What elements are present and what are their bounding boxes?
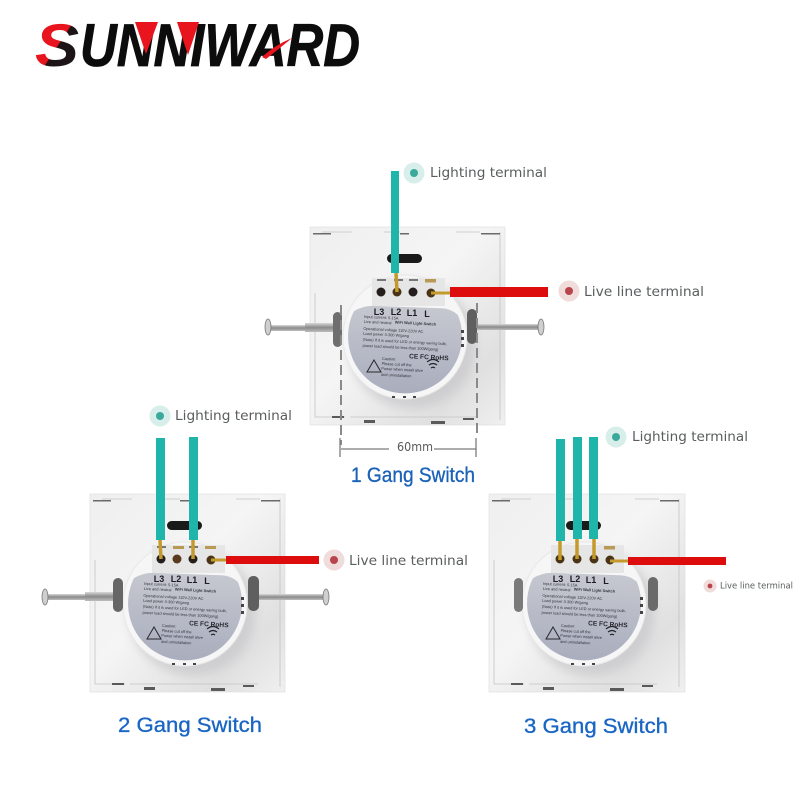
callout: lighting terminal, 3 gang: Lighting terminal bbox=[632, 429, 748, 445]
label text: Power when install alive bbox=[560, 633, 602, 640]
label text: Load power 3-300 W/gang bbox=[542, 598, 588, 605]
callout: lighting terminal, 3 gang bbox=[606, 426, 748, 448]
label text: and uninstallation bbox=[161, 639, 191, 645]
module shadow bbox=[348, 281, 476, 409]
heading: 2 Gang Switch: 2 Gang Switch bbox=[118, 713, 262, 737]
product label bbox=[525, 572, 642, 662]
module shadow bbox=[527, 548, 655, 676]
frame lines bbox=[95, 499, 280, 687]
product label bbox=[346, 305, 463, 395]
icon: warning triangle bbox=[546, 627, 560, 639]
dimension: 60mm bbox=[340, 303, 477, 457]
icon: wifi bbox=[207, 626, 219, 635]
label text: Operational voltage 110V-220V AC bbox=[542, 593, 603, 601]
label text: Operational voltage 110V-220V AC bbox=[143, 593, 204, 601]
terminal names bbox=[553, 574, 609, 586]
label text: Please cut off the bbox=[382, 361, 412, 367]
callout: lighting terminal, 2 gang bbox=[150, 406, 292, 426]
icon: wifi bbox=[427, 360, 439, 368]
brass marks bbox=[173, 546, 216, 549]
terminal block bbox=[551, 545, 624, 573]
lighting wires, 3 gang bbox=[556, 437, 598, 560]
screw slots bbox=[157, 546, 198, 548]
corner marks bbox=[93, 500, 280, 502]
callout: live line terminal, 1 gang bbox=[558, 280, 704, 302]
lighting wires, 2 gang bbox=[156, 437, 198, 559]
live wire, 2 gang bbox=[211, 556, 319, 564]
terminal names: L3 bbox=[553, 574, 563, 584]
callout: lighting terminal, 2 gang: Lighting terminal bbox=[175, 408, 292, 424]
logo: Sunniward: S bbox=[35, 12, 79, 79]
label text: power load should be less than 100W/gang) bbox=[362, 343, 439, 352]
label text: Please cut off the bbox=[162, 628, 192, 634]
label text: Input current: 5-15A bbox=[543, 581, 578, 588]
terminal names: L bbox=[424, 309, 430, 319]
right clip bbox=[248, 576, 259, 611]
round module bbox=[343, 275, 467, 399]
switch: 2 gang unit bbox=[42, 494, 329, 692]
label text: power load should be less than 100W/gang) bbox=[541, 610, 618, 619]
label text: Power when install alive bbox=[381, 366, 423, 373]
label text: and uninstallation bbox=[381, 372, 411, 378]
callout: live line terminal, 3 gang bbox=[704, 580, 793, 592]
live wire, 3 gang bbox=[610, 557, 726, 565]
label text bbox=[540, 581, 630, 647]
label text: WiFi Wall Light Switch bbox=[395, 319, 437, 327]
right screw bbox=[477, 319, 544, 335]
corner marks bbox=[492, 500, 679, 502]
label text: Input current: 5-15A bbox=[144, 581, 179, 588]
terminal names: L1 bbox=[407, 308, 417, 318]
terminal names bbox=[374, 307, 430, 319]
right clip bbox=[648, 577, 658, 611]
left screw bbox=[42, 589, 113, 605]
terminal names: L1 bbox=[586, 575, 596, 585]
label text bbox=[361, 314, 451, 380]
round module bbox=[522, 542, 646, 666]
frame lines bbox=[315, 232, 500, 420]
logo: Sunniward: UNNIWARD bbox=[80, 12, 360, 79]
label text: WiFi Wall Light Switch bbox=[574, 586, 616, 594]
label text: (Note) If it is used for LED or energy saving bulb, bbox=[542, 604, 626, 613]
icon: wifi bbox=[606, 626, 618, 635]
module notches bbox=[392, 330, 464, 398]
label text: (Note) If it is used for LED or energy saving bulb, bbox=[143, 604, 227, 613]
label text: and uninstallation bbox=[560, 639, 590, 645]
label text: (Note) If it is used for LED or energy saving bulb, bbox=[363, 337, 447, 346]
mounting slot bbox=[566, 521, 601, 530]
plate: 1 gang back plate bbox=[310, 227, 505, 425]
label text: Caution: bbox=[162, 623, 177, 629]
product label bbox=[126, 572, 243, 662]
plate: 2 gang back plate bbox=[90, 494, 285, 692]
right screw bbox=[259, 589, 329, 605]
switch: 3 gang unit bbox=[489, 494, 685, 692]
terminal names: L2 bbox=[570, 574, 580, 584]
label text: CE FC RoHS bbox=[409, 353, 449, 362]
switch: 1 gang unit bbox=[265, 171, 548, 457]
terminal names: L bbox=[204, 576, 210, 586]
terminal names bbox=[154, 574, 210, 586]
brass mark bbox=[604, 546, 615, 550]
label text: Live and neutral bbox=[144, 586, 172, 592]
module notches bbox=[172, 597, 244, 665]
terminal holes bbox=[376, 288, 436, 298]
terminal names: L2 bbox=[391, 307, 401, 317]
heading: 1 Gang Switch: 1 Gang Switch bbox=[351, 463, 475, 487]
mounting slot bbox=[387, 254, 422, 263]
terminal names: L1 bbox=[187, 575, 197, 585]
label text: WiFi Wall Light Switch bbox=[175, 586, 217, 594]
terminal holes bbox=[556, 554, 614, 564]
label text: Operational voltage 110V-220V AC bbox=[363, 326, 424, 334]
label text: Load power 3-300 W/gang bbox=[143, 598, 189, 605]
label text: Live and neutral bbox=[543, 586, 571, 592]
label text: Live and neutral bbox=[364, 319, 392, 325]
left clip bbox=[113, 578, 123, 612]
label text: Caution: bbox=[382, 356, 397, 362]
module shadow bbox=[128, 548, 256, 676]
label text: Please cut off the bbox=[561, 628, 591, 634]
frame lines bbox=[494, 499, 679, 687]
left clip bbox=[333, 312, 342, 347]
live wire bbox=[431, 287, 548, 297]
terminal names: L bbox=[603, 576, 609, 586]
right clip bbox=[467, 309, 477, 344]
callout: live line terminal, 1 gang: Live line terminal bbox=[584, 284, 704, 300]
heading: 3 Gang Switch: 3 Gang Switch bbox=[524, 714, 668, 738]
label text: Input current: 5-15A bbox=[364, 314, 399, 321]
callout: live line terminal, 2 gang: Live line terminal bbox=[349, 553, 468, 569]
callout: lighting terminal, 1 gang: Lighting terminal bbox=[430, 165, 547, 181]
bottom clips bbox=[511, 683, 653, 691]
lighting wire bbox=[391, 171, 399, 292]
label text: power load should be less than 100W/gang) bbox=[142, 610, 219, 619]
bottom clips bbox=[112, 683, 254, 691]
module notches bbox=[571, 597, 643, 665]
label text: Load power 3-300 W/gang bbox=[363, 331, 409, 338]
round module bbox=[123, 542, 247, 666]
label text bbox=[141, 581, 231, 647]
terminal names: L3 bbox=[374, 307, 384, 317]
label text: CE FC RoHS bbox=[588, 620, 628, 629]
terminal block bbox=[372, 278, 445, 306]
callout: live line terminal, 2 gang bbox=[324, 550, 468, 570]
dimension: 60mm: 60mm bbox=[397, 440, 433, 454]
callout: lighting terminal, 1 gang bbox=[404, 162, 547, 184]
terminal names: L2 bbox=[171, 574, 181, 584]
terminal block bbox=[152, 545, 225, 573]
left screw bbox=[265, 319, 334, 335]
terminal names: L3 bbox=[154, 574, 164, 584]
label text: CE FC RoHS bbox=[189, 620, 229, 629]
label text: Power when install alive bbox=[161, 633, 203, 640]
callout: live line terminal, 3 gang: Live line terminal bbox=[720, 582, 793, 592]
label text: Caution: bbox=[561, 623, 576, 629]
bottom clips bbox=[332, 416, 474, 424]
plate: 3 gang back plate bbox=[489, 494, 685, 692]
terminal holes bbox=[156, 554, 216, 564]
icon: warning triangle bbox=[367, 360, 381, 372]
icon: warning triangle bbox=[147, 627, 161, 639]
screw slots bbox=[377, 279, 418, 281]
mounting slot bbox=[167, 521, 202, 530]
corner marks bbox=[313, 233, 500, 234]
left clip bbox=[514, 578, 523, 612]
